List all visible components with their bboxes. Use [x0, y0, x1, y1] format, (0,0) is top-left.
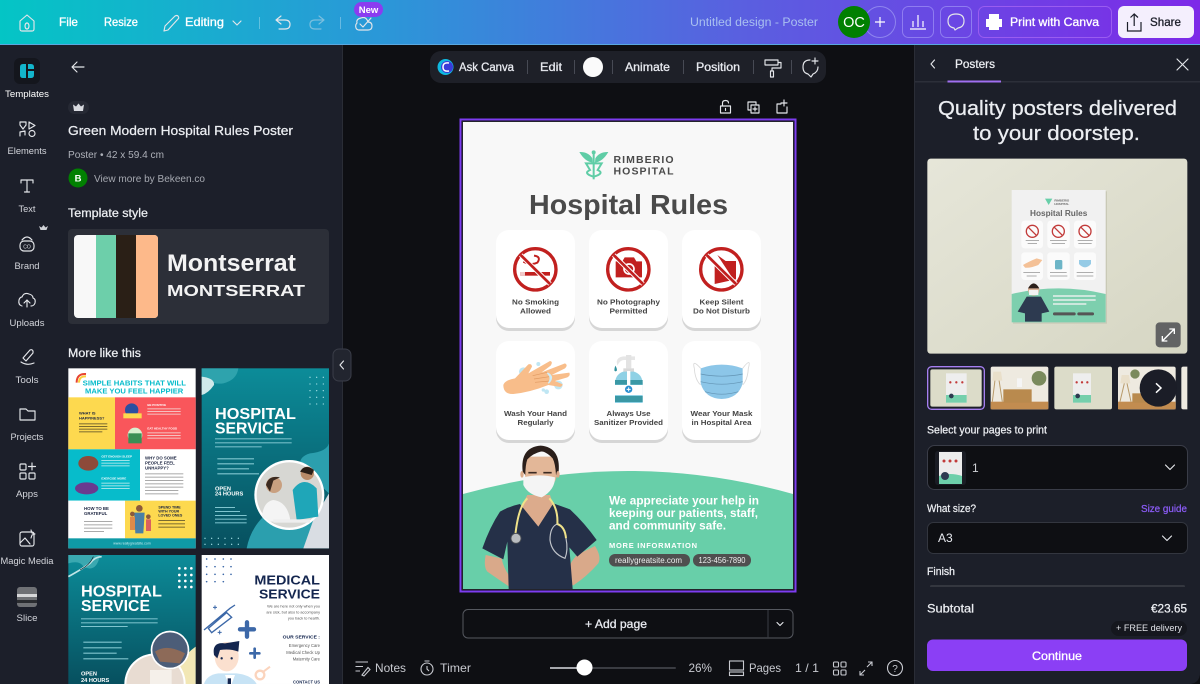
context toolbar: Ask Canva [459, 60, 514, 74]
subtotal: Subtotal [927, 602, 974, 616]
bottom status bar: Pages [749, 661, 781, 675]
poster title: Hospital Rules [529, 189, 728, 220]
rule card: sanitizer: Always Use [606, 409, 650, 418]
rule card: wash hands: Wash Your Hand [504, 409, 567, 418]
nav: text [18, 180, 36, 215]
rule card: wash hands [496, 341, 575, 443]
rule card: no smoking: Allowed [520, 306, 551, 316]
nurse photo [482, 446, 599, 589]
rule card: sanitizer [589, 341, 668, 443]
thumbnail: hospital service teal: OPEN [215, 486, 231, 492]
hospital name [614, 154, 674, 178]
thumbnail: simple habits: EAT HEALTHY FOOD [147, 426, 178, 430]
next arrow [1140, 369, 1177, 407]
rule card: no photography: No Photography [597, 298, 661, 306]
appreciation message: keeping our patients, staff, [609, 506, 758, 520]
template style card [68, 229, 329, 324]
poster mockup image: HOSPITAL [1054, 202, 1069, 206]
poster mockup image [927, 159, 1187, 354]
comment button [940, 6, 972, 38]
footer background [915, 587, 1200, 684]
size dropdown [928, 522, 1188, 554]
website pill [609, 554, 690, 566]
thumbnail: hospital service dark teal: OPEN [81, 671, 97, 677]
thumbnail: simple habits [68, 368, 196, 548]
heading: quality posters: Quality posters delivered [938, 98, 1177, 120]
design title: Untitled design - Poster [690, 17, 818, 29]
thumbnail: simple habits: WITH YOUR [158, 509, 180, 513]
icon: sanitizer bottle [614, 355, 643, 403]
free delivery note: + FREE delivery [1116, 623, 1182, 634]
context toolbar [430, 51, 826, 83]
template style card: Montserrat [167, 250, 296, 277]
thumbnail: simple habits: HAPPINESS? [79, 415, 105, 420]
icon: keep silent [701, 249, 742, 290]
nav: elements: Elements [8, 146, 47, 157]
author [68, 168, 205, 188]
thumbnail: hospital service teal: 24 HOURS [215, 492, 244, 498]
icon: fullscreen [860, 662, 872, 675]
icon: help [888, 660, 902, 676]
author: View more by Bekeen.co [94, 173, 205, 185]
thumbnail: simple habits: SIMPLE HABITS THAT WILL [83, 378, 186, 387]
add page button [463, 610, 793, 638]
thumbnail: medical service [202, 555, 329, 684]
share button [1118, 6, 1194, 38]
continue button [927, 640, 1187, 671]
file menu: File [59, 15, 78, 29]
icon: close [1177, 59, 1188, 70]
thumbnail: hospital service teal [202, 368, 329, 548]
subtotal: €23.65 [1151, 602, 1187, 616]
rule card: sanitizer: Sanitizer Provided [594, 418, 663, 427]
thumbnail: simple habits: www.reallygreatsite.com [113, 542, 151, 546]
rule card: no smoking: No Smoking [512, 298, 559, 306]
appreciation message: and community safe. [609, 518, 726, 532]
rule card: mask: in Hospital Area [692, 418, 752, 427]
add page button: + Add page [585, 617, 647, 631]
thumbnail: medical service: Emergency Care [289, 643, 321, 648]
size dropdown: A3 [938, 531, 953, 545]
nav: templates [5, 58, 49, 100]
panel: left sidebar [0, 45, 351, 684]
nav: brand [14, 225, 48, 272]
nav: slice [16, 587, 38, 624]
heading: quality posters: to your doorstep. [973, 123, 1140, 145]
thumbnail: simple habits: MAKE YOU FEEL HAPPIER [85, 387, 184, 396]
heading: quality posters [938, 98, 1177, 145]
thumbnail: hospital service dark teal [68, 555, 196, 684]
thumbnail: medical service: OUR SERVICE : [283, 634, 320, 640]
context toolbar: Position [696, 60, 740, 74]
thumbnail: medical service: you back to health. [288, 616, 320, 620]
panel: posters ordering [914, 45, 1200, 684]
icon: face mask [694, 362, 749, 399]
size guide link: Size guide [1141, 503, 1187, 515]
icon: pencil [164, 16, 179, 31]
thumbnail: simple habits: WHAT IS [79, 411, 96, 416]
icon: back arrow [72, 62, 84, 72]
context toolbar: Edit [540, 60, 563, 74]
thumbnail: medical service: We are here not only when you [267, 605, 320, 609]
icon: cloud saved [356, 18, 372, 30]
avatar: OC [843, 15, 865, 31]
nav: projects [10, 409, 44, 443]
print with canva button: Print with Canva [1010, 15, 1099, 29]
thumbnail: medical service: are sick, but also to accompany [266, 610, 320, 614]
icon: home [20, 15, 34, 31]
panel collapse handle [333, 349, 351, 381]
more information label: MORE INFORMATION [609, 541, 697, 550]
poster mockup image: Hospital Rules [1030, 209, 1088, 218]
nav: apps: Apps [16, 489, 38, 500]
thumbnail: simple habits: SPEND TIME [158, 505, 181, 509]
resize menu: Resize [104, 15, 138, 29]
thumbnail: simple habits: WHY DO SOME [145, 455, 177, 460]
rule card: keep silent [682, 230, 761, 331]
icon: pages [730, 661, 744, 676]
thumbnail: simple habits: HOW TO BE [84, 506, 109, 511]
thumbnail: simple habits: UNHAPPY? [145, 465, 169, 470]
thumbnail: medical service: Medical Check Up [286, 650, 321, 655]
author: B [75, 174, 82, 184]
thumbnail: hospital service dark teal: 24 HOURS [81, 678, 110, 684]
nav: uploads [10, 293, 45, 329]
thumbnail: simple habits: LOVED ONES [158, 513, 183, 517]
editing menu: Editing [185, 15, 224, 29]
appreciation message: We appreciate your help in [609, 494, 759, 508]
thumbnail: simple habits: PEOPLE FEEL [145, 460, 175, 465]
rule card: wash hands: Regularly [518, 418, 554, 427]
rule card: no photography: Permitted [610, 306, 648, 316]
phone pill: 123-456-7890 [698, 556, 746, 565]
icon: no smoking [515, 249, 556, 290]
rule card: no smoking [496, 230, 575, 331]
subtotal [927, 602, 1187, 616]
thumbnail: medical service: MEDICAL [254, 573, 320, 588]
poster [460, 120, 796, 592]
bottom status bar: 26% [688, 661, 712, 675]
new badge: New [359, 5, 379, 16]
icon: grid view [834, 662, 846, 675]
thumbnail: simple habits: EXERCISE MORE [101, 476, 126, 480]
nav: magic media: Magic Media [0, 556, 54, 567]
nav: templates: Templates [5, 89, 49, 100]
icon: crown badge [68, 101, 89, 114]
add collaborator button [864, 6, 896, 38]
icon: chevron [233, 21, 241, 25]
icon: help: ? [892, 664, 898, 675]
template style card: MONTSERRAT [167, 283, 305, 300]
bottom status bar [356, 660, 902, 676]
rule card: no photography [589, 230, 668, 331]
poster mockup image: RIMBERIO [1054, 198, 1070, 202]
page dropdown [928, 446, 1188, 490]
rule card: mask: Wear Your Mask [690, 409, 753, 418]
icon: notes [356, 662, 370, 676]
thumbnail: simple habits: GET ENOUGH SLEEP [101, 454, 132, 458]
hospital logo [579, 150, 608, 179]
thumbnail: hospital service teal: HOSPITAL [215, 406, 296, 423]
thumbnail: medical service: SERVICE [259, 586, 320, 601]
share button: Share [1150, 15, 1181, 29]
rule card: keep silent: Do Not Disturb [693, 306, 750, 316]
thumbnail: simple habits: GRATEFUL [84, 511, 108, 516]
top header bar [0, 0, 1200, 45]
continue button: Continue [1032, 649, 1082, 663]
nav: brand: CO [23, 244, 31, 250]
page dropdown: 1 [972, 461, 979, 475]
nav: brand: Brand [14, 261, 40, 272]
context toolbar: Animate [625, 60, 670, 74]
icon: back chevron [931, 60, 934, 68]
nav: elements [8, 122, 47, 157]
nav: tools [16, 350, 39, 386]
label: finish: Finish [927, 566, 955, 578]
hospital name: HOSPITAL [614, 166, 674, 178]
thumbnail: hospital service dark teal: HOSPITAL [81, 584, 162, 601]
icon: redo [310, 16, 324, 29]
avatar [838, 6, 870, 38]
zoom slider [550, 660, 676, 676]
thumbnail: simple habits: BE POSITIVE [147, 403, 166, 407]
nav: tools: Tools [16, 375, 39, 386]
heading: more like this: More like this [68, 348, 141, 360]
rule card: mask [682, 341, 761, 443]
icon: no photography [608, 249, 649, 290]
nav: apps [16, 463, 38, 500]
template size: Poster • 42 x 59.4 cm [68, 149, 164, 161]
icon: undo [276, 16, 290, 29]
nav: text: Text [18, 204, 36, 215]
nav: slice: Slice [16, 613, 38, 624]
insights button [902, 6, 934, 38]
label: what size: What size? [927, 503, 976, 515]
tab: posters: Posters [955, 57, 995, 71]
thumbnail: hospital service dark teal: SERVICE [81, 598, 150, 615]
appreciation message [609, 494, 759, 532]
nav: uploads: Uploads [10, 318, 45, 329]
rule card: keep silent: Keep Silent [700, 298, 744, 306]
icon: wash hands [503, 361, 570, 394]
icon: timer [421, 661, 433, 675]
icon: ask canva [438, 59, 454, 75]
bottom status bar: Timer [440, 661, 471, 675]
nav: projects: Projects [10, 432, 44, 443]
print with canva button [978, 6, 1112, 38]
hospital name: RIMBERIO [614, 154, 674, 166]
heading: template style: Template style [68, 208, 148, 220]
expand button [1156, 322, 1181, 347]
template title: Green Modern Hospital Rules Poster [68, 123, 294, 138]
new badge [354, 2, 383, 17]
page action icons [720, 100, 787, 113]
nav: magic media [0, 530, 54, 567]
label: select pages: Select your pages to print [927, 424, 1047, 436]
website pill: reallygreatsite.com [615, 556, 682, 565]
thumbnail: hospital service teal: SERVICE [215, 420, 284, 437]
phone pill [693, 554, 751, 566]
mockup thumbnails [928, 367, 1187, 409]
bottom status bar: Notes [375, 661, 406, 675]
green banner [463, 471, 793, 589]
thumbnail: medical service: Maternity Care [293, 657, 321, 662]
bottom status bar: 1 / 1 [795, 661, 819, 675]
free delivery note [1111, 621, 1187, 636]
